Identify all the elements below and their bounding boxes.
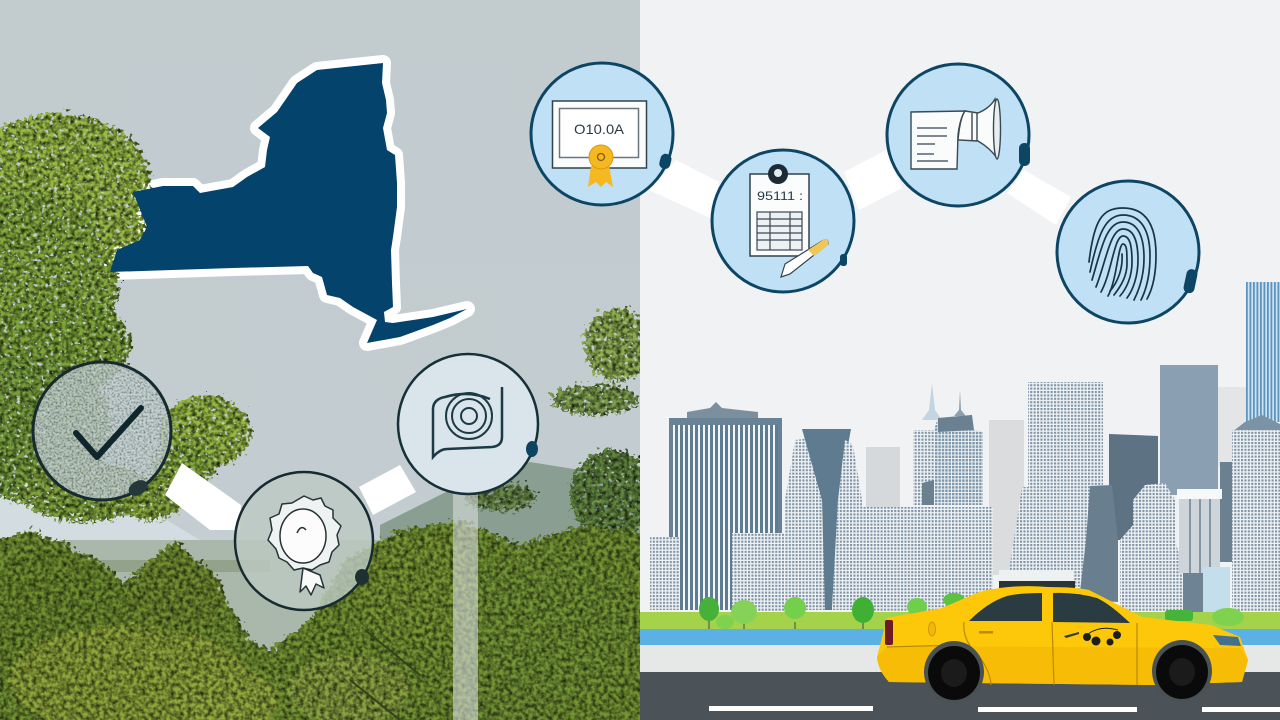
taxi: handles and fuel cap [928,622,1079,638]
icon: speech bubble target [433,387,502,457]
building: striped headquarters [669,402,782,610]
building: wedge tower [785,429,862,610]
icon: scroll with funnel [911,99,1000,169]
taxi: rear wheel [924,641,984,703]
building: pale background towers [866,387,1246,575]
icon: fingerprint [1089,208,1156,300]
icon: rosette [268,496,341,595]
icon: certificate: O10.0A [574,121,625,137]
taxi: roof sign [999,570,1075,588]
building: front mid tower [1009,487,1068,570]
vertical translucent post [453,488,478,720]
building: striped tower top right [1246,282,1280,422]
taxi: door lines [887,622,1137,685]
step: award rosette [235,472,373,610]
taxi: door logo [1083,628,1121,646]
step: verified check [33,362,171,500]
taxi: body [877,586,1248,685]
tree: upper right branches [464,309,654,540]
building: dark slate tower [1079,485,1118,602]
street: water [640,629,1280,645]
building: twin spires [913,383,983,505]
panel: distant hills [0,462,640,650]
icon: clipboard with form: 95111 : [757,189,803,203]
connectors: left route [165,463,416,530]
building: columns and spine [1177,462,1236,613]
taxi: tail light [885,620,893,645]
icon: clipboard with form [750,164,828,277]
street: trees [699,593,1244,630]
building: dark tower [1109,434,1158,540]
icon: certificate [552,101,646,187]
icon: check mark [76,408,141,457]
skyline: city buildings [650,282,1280,615]
taxi: windows [969,593,1130,623]
tree: left canopy [0,114,150,522]
street: grass strip [640,612,1280,629]
tree: foreground canopy [0,520,660,720]
tree: branch cluster [115,396,251,520]
street: road [640,672,1280,720]
building: right window tower [1232,415,1280,612]
connectors: right route [649,150,1071,225]
street: lane markings [709,706,1280,712]
step: fingerprint [1057,181,1199,323]
panel: NY map outline [110,63,467,343]
step: document scroll and horn [887,64,1030,206]
panel: right city background [640,0,1280,720]
step: speech bubble badge [398,354,538,494]
taxi: front wheel [1152,640,1212,702]
taxi: yellow cab [877,570,1248,703]
building: low left blocks [650,533,784,611]
branches [350,630,420,720]
panel: left nature background [0,0,640,720]
street: sidewalk [640,645,1280,672]
step: certificate [531,63,673,205]
map: New York state silhouette [110,63,467,343]
panel: foliage [0,114,660,720]
building: domed window tower [1120,483,1185,615]
building: wide midrise block [862,507,993,612]
step: application form [712,150,854,292]
taxi: head light [1213,635,1241,646]
building: tall window tower [1028,382,1103,597]
building: slate tower [1160,365,1218,495]
